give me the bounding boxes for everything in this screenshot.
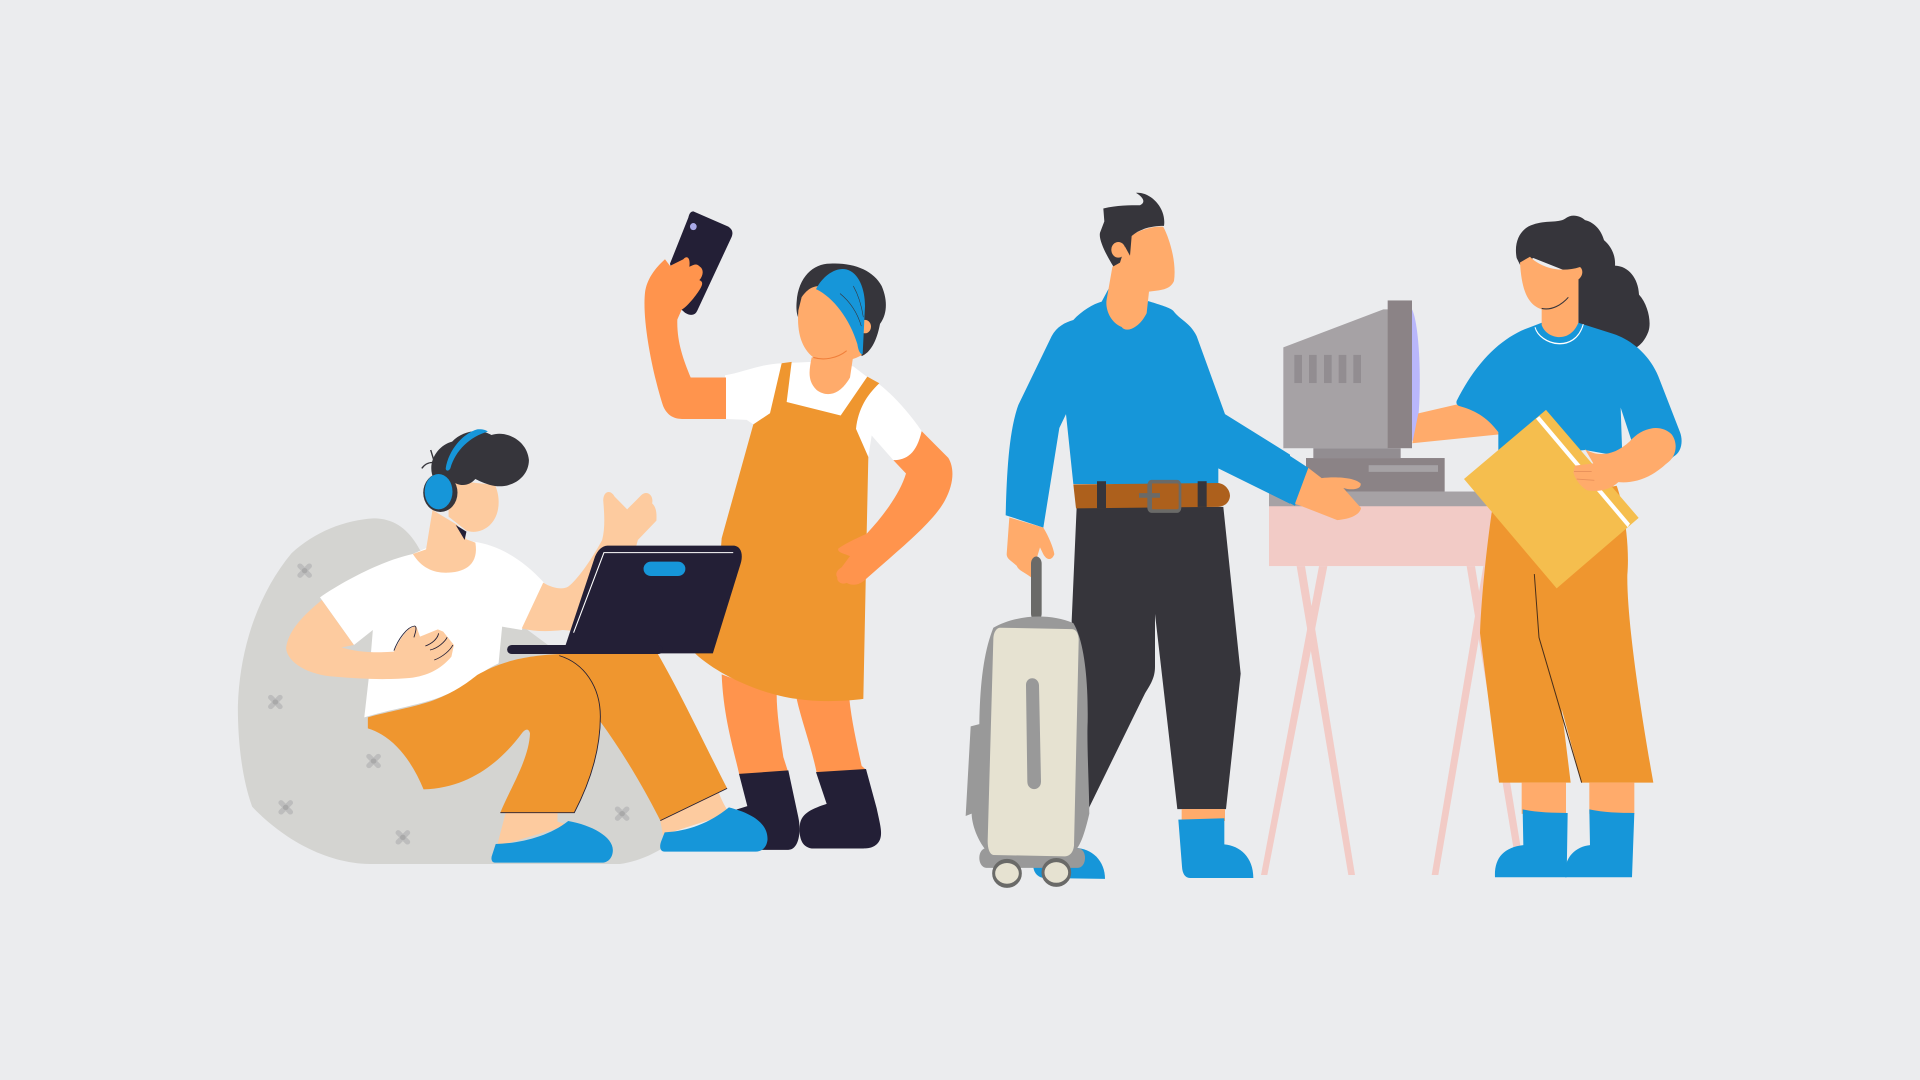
woman hair [1516,216,1650,347]
man head and neck [1106,227,1175,330]
woman legs [1522,783,1634,814]
woman legs [722,674,867,775]
woman blue shoes [1495,809,1634,877]
man hand on desk [1295,468,1361,520]
woman arm to monitor [1412,404,1499,443]
neck shadow [456,525,466,540]
figure: woman with folder and man's reaching arm [1250,216,1682,877]
woman blue shirt [1456,323,1682,463]
laptop [507,546,742,654]
phone [670,211,732,315]
woman neck [810,355,853,394]
woman face [1520,257,1582,312]
woman hair [796,264,886,356]
woman raised arm and hand [644,257,726,419]
woman trousers [1480,486,1653,783]
collar line [1535,324,1583,344]
headphones [423,429,488,512]
woman neck [1542,279,1578,337]
woman ear [859,320,871,333]
woman black boots [733,769,881,850]
woman face [798,286,862,361]
man trousers [1072,507,1241,809]
woman arm on hip [836,431,952,585]
table top [1269,506,1493,566]
man hair [1100,193,1164,266]
man left shoe [1033,848,1105,879]
man front leg [368,654,600,813]
woman smile [813,351,847,359]
woman smile [1542,297,1568,309]
man blue shoes [491,807,768,863]
yellow folder [1464,410,1639,588]
blue headband [816,269,865,354]
man right shoe [1178,818,1253,878]
desk slab [1269,492,1490,506]
suitcase [966,557,1089,886]
monitor [1283,300,1445,492]
figure: desk with computer [1261,300,1521,875]
woman white shirt [725,362,922,460]
man blue shirt [1006,289,1290,528]
man left arm and hand on chest [286,600,454,679]
figure: man on beanbag with laptop [238,429,768,864]
man right arm and raised hand [522,492,657,633]
woman arm and hand holding folder [1573,428,1676,491]
table legs [1261,566,1521,875]
brown belt [1073,481,1230,511]
figure: woman taking selfie in orange dress [644,211,952,850]
man hair [422,431,529,486]
figure: man with suitcase [966,193,1290,886]
man face [449,480,499,532]
orange dress [695,362,879,701]
beanbag [238,518,670,864]
man hand [1007,517,1054,577]
man back leg [559,653,727,821]
man ankle [1182,809,1225,821]
man ear [1111,242,1125,258]
man neck and collar [413,510,476,573]
man ankles [497,792,730,847]
man white t-shirt [320,542,544,717]
man forearm [1250,430,1308,506]
